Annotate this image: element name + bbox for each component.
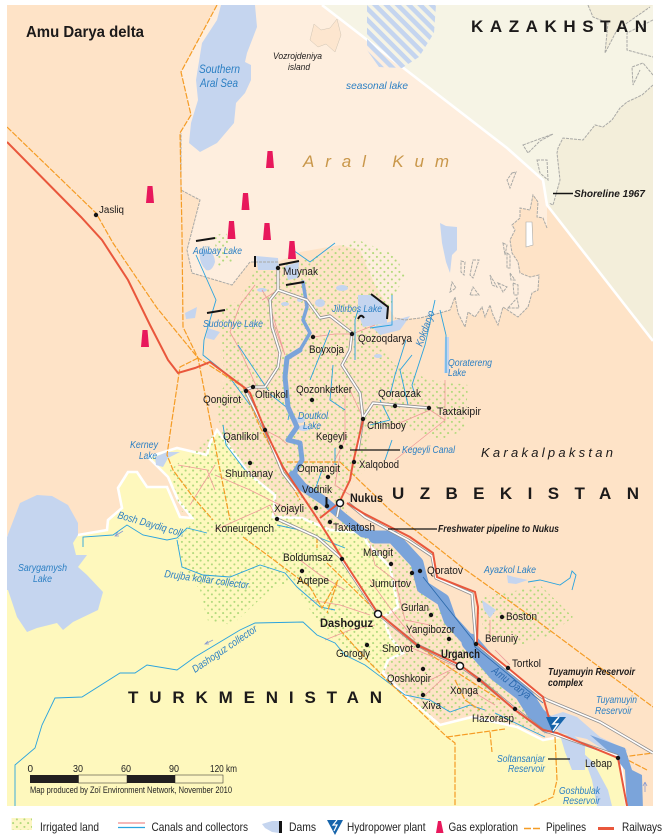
water labels: seasonal lake <box>346 80 408 92</box>
roads <box>245 268 653 756</box>
settlement names: Qozoqdarya <box>358 333 413 345</box>
settlement names: Boston <box>506 611 537 623</box>
settlement names: Muynak <box>283 266 318 278</box>
scale bar: 30 <box>73 764 83 775</box>
callouts: Shoreline 1967 <box>574 189 645 200</box>
settlement names: Shumanay <box>225 468 273 480</box>
water labels: Jiltirbos Lake <box>331 303 382 315</box>
region: Turkmenistan <box>3 430 627 810</box>
water labels: Drujba kollar collector <box>164 568 250 592</box>
callouts: Tuyamuyin Reservoir <box>548 667 636 678</box>
settlement names: Qozonketker <box>296 384 352 396</box>
settlement names: Yangibozor <box>406 624 455 636</box>
settlement names: Qoratov <box>427 565 463 577</box>
legend: canals and collectors: Canals and collectors <box>152 820 248 834</box>
major city names: Dashoguz <box>320 616 373 630</box>
water labels: Lake <box>139 450 157 462</box>
legend: hydropower plant <box>327 820 426 835</box>
island label <box>273 51 322 73</box>
region: Kazakhstan <box>324 5 653 205</box>
settlement names: Gorogly <box>336 648 370 660</box>
legend: hydropower plant: Hydropower plant <box>347 820 426 834</box>
water labels: Sudochye Lake <box>203 318 263 330</box>
water labels: Sarygamysh <box>18 562 67 574</box>
gas exploration markers <box>141 151 296 347</box>
settlement dots <box>94 213 620 760</box>
small flow arrows <box>115 531 647 792</box>
island label: Vozrojdeniya <box>273 51 322 62</box>
country: Turkmenistan: TURKMENISTAN <box>128 688 382 707</box>
legend: irrigated land <box>12 818 99 834</box>
heading: Amu Darya delta: Amu Darya delta <box>26 24 144 41</box>
settlement names: Oqmangit <box>297 463 340 475</box>
settlement names: Taxtakipir <box>437 406 481 418</box>
scale bar: 120 km <box>210 764 237 775</box>
region: Vozrojdeniya island <box>310 19 341 52</box>
legend: irrigated land: Irrigated land <box>40 820 99 834</box>
water labels: Doutkol <box>298 410 329 422</box>
callouts <box>350 189 645 759</box>
settlement names: Beruniy <box>485 633 518 645</box>
settlement names: Aqtepe <box>297 575 329 587</box>
settlement names: Chimboy <box>367 420 406 432</box>
canals pink <box>178 285 510 705</box>
settlement names: Xonga <box>450 685 479 697</box>
settlement names: Taxiatosh <box>333 522 375 534</box>
settlement names <box>99 205 612 770</box>
water labels: Aral Sea <box>199 76 238 90</box>
settlement names: Mangit <box>363 547 393 559</box>
water labels: Reservoir <box>563 795 600 807</box>
legend: pipelines <box>524 820 586 834</box>
scale bar: 0 <box>28 764 34 775</box>
legend: gas exploration: Gas exploration <box>448 820 518 834</box>
settlement names: Gurlan <box>401 602 429 614</box>
region: Aral Kum: Aral Kum <box>302 152 449 171</box>
water labels: Soltansanjar <box>497 753 545 765</box>
legend: dams: Dams <box>289 820 316 834</box>
credit: Map produced by Zoï Environment Network, November 2010 <box>30 785 232 795</box>
lake: seasonal lake hatch <box>367 5 436 68</box>
water labels: Kerney <box>130 439 159 451</box>
reservoir: Tuyamuyin <box>550 712 627 752</box>
lake: Sarygamysh <box>7 495 103 632</box>
major city names: Urganch <box>441 647 480 661</box>
city circles <box>336 500 464 670</box>
region: Kazakhstan mainland <box>547 85 653 341</box>
country: Kazakhstan: KAZAKHSTAN <box>471 17 647 36</box>
settlement names: Qongirot <box>203 394 241 406</box>
settlement names: Jumurtov <box>370 578 411 590</box>
water labels: Dashoguz collector <box>190 623 260 675</box>
canals blue <box>15 243 576 806</box>
settlement names: Shovot <box>382 643 413 655</box>
water labels: Kokdaryo <box>414 309 438 348</box>
major city names <box>320 491 480 661</box>
dams <box>196 238 388 508</box>
scale bar <box>28 764 237 783</box>
settlement names: Lebap <box>585 758 612 770</box>
scale bar: 60 <box>121 764 131 775</box>
water labels: Reservoir <box>595 705 632 717</box>
white lake in sea bed <box>526 222 533 247</box>
settlement names: Jasliq <box>99 205 124 216</box>
settlement names: Tortkol <box>512 658 541 670</box>
region: Kazakhstan north-east mainland <box>588 5 653 53</box>
callouts: complex <box>548 678 583 689</box>
region: Aral Kum dry sea bed <box>181 5 547 327</box>
settlement names: Qoraozak <box>378 388 421 400</box>
lake: Southern Aral Sea <box>189 5 257 152</box>
water labels: Kegeyli Canal <box>402 444 456 456</box>
settlement names: Oltinkol <box>255 389 288 401</box>
legend: canals and collectors <box>118 820 248 834</box>
water labels: Amu Darya <box>489 664 533 702</box>
settlement names: Hazorasp <box>472 713 514 725</box>
small lakes <box>155 223 612 806</box>
irrigated land <box>170 232 573 735</box>
region: Karakalpakstan: Karakalpakstan <box>481 445 613 460</box>
island label: island <box>288 62 311 73</box>
legend: pipelines: Pipelines <box>546 820 586 834</box>
water labels: Lake <box>33 573 52 585</box>
water labels: Reservoir <box>508 763 545 775</box>
water labels: Adjibay Lake <box>192 245 242 257</box>
scale bar: 90 <box>169 764 179 775</box>
water labels: Lake <box>448 367 466 379</box>
major city names: Nukus <box>350 491 383 505</box>
legend <box>12 818 662 835</box>
settlement names: Kegeyli <box>316 431 347 443</box>
settlement names: Vodnik <box>302 484 332 496</box>
settlement names: Qoshkopir <box>387 673 431 685</box>
water labels: Ayazkol Lake <box>483 564 536 576</box>
river: Amu Darya <box>285 282 643 810</box>
legend: dams <box>262 820 316 834</box>
settlement names: Xiva <box>422 700 442 712</box>
callouts: Freshwater pipeline to Nukus <box>438 524 559 535</box>
settlement names: Qanlikol <box>223 431 259 443</box>
water labels: Goshbulak <box>559 785 601 797</box>
water labels: Southern <box>199 62 240 76</box>
settlement names: Koneurgench <box>215 523 274 535</box>
water labels: Qoratereng <box>448 357 492 369</box>
border: Kazakhstan white line <box>322 5 653 341</box>
water labels: Bosh Daydiq coll. <box>116 509 186 540</box>
railways <box>7 142 627 806</box>
settlement names: Boyxoja <box>309 344 345 356</box>
water labels: Lake <box>303 420 321 432</box>
shoreline 1967 <box>181 5 653 327</box>
country: Uzbekistan: UZBEKISTAN <box>392 484 639 503</box>
icon: hydropower plant <box>546 717 566 733</box>
legend: railways <box>598 820 662 834</box>
water labels: Tuyamuyin <box>596 694 637 706</box>
settlement names: Xalqobod <box>359 459 399 471</box>
settlement names: Xojayli <box>274 503 304 515</box>
settlement names: Boldumsaz <box>283 552 333 564</box>
